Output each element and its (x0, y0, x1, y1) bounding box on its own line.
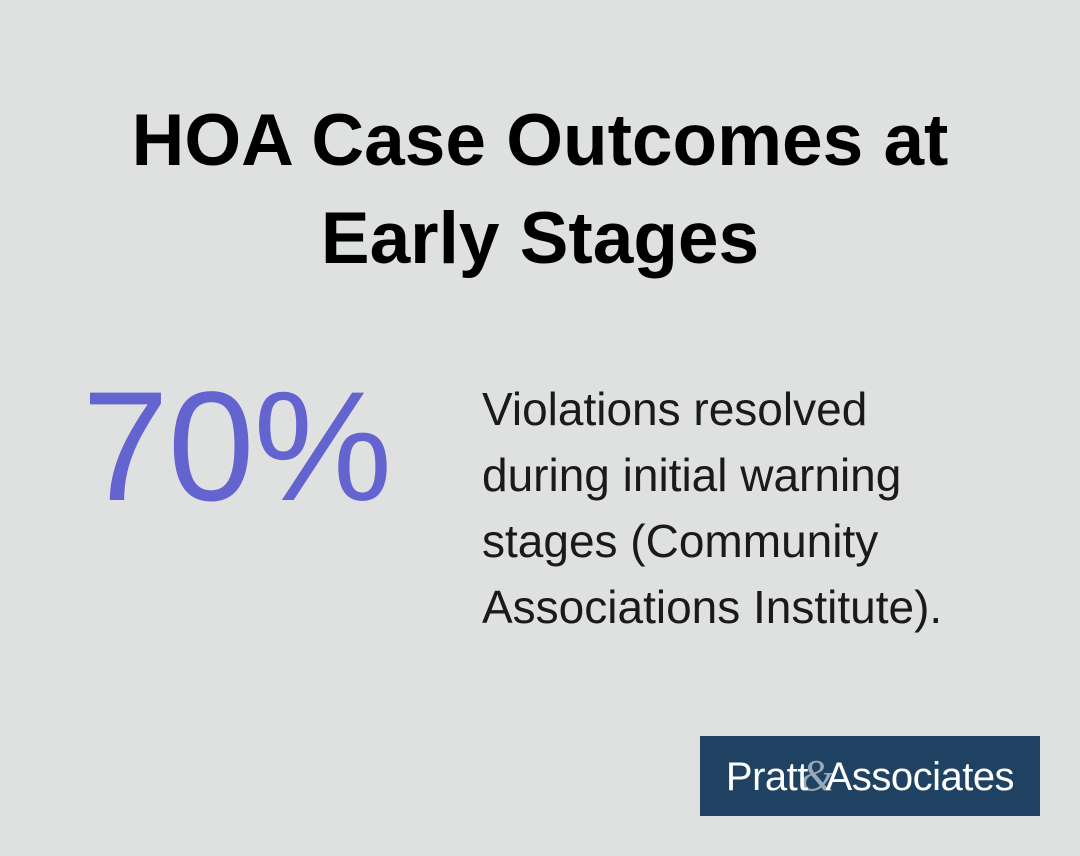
big statistic: 70% (82, 360, 391, 534)
description text: Violations resolved (482, 383, 867, 435)
description text (482, 383, 942, 633)
title (132, 100, 948, 279)
logo: Pratt & Associates (700, 736, 1040, 816)
title: HOA Case Outcomes at (132, 100, 948, 181)
description text: stages (Community (482, 515, 878, 567)
description text: during initial warning (482, 449, 901, 501)
description text: Associations Institute). (482, 581, 942, 633)
title: Early Stages (321, 198, 759, 279)
logo: Pratt & Associates: Pratt&Associates (726, 751, 1014, 800)
